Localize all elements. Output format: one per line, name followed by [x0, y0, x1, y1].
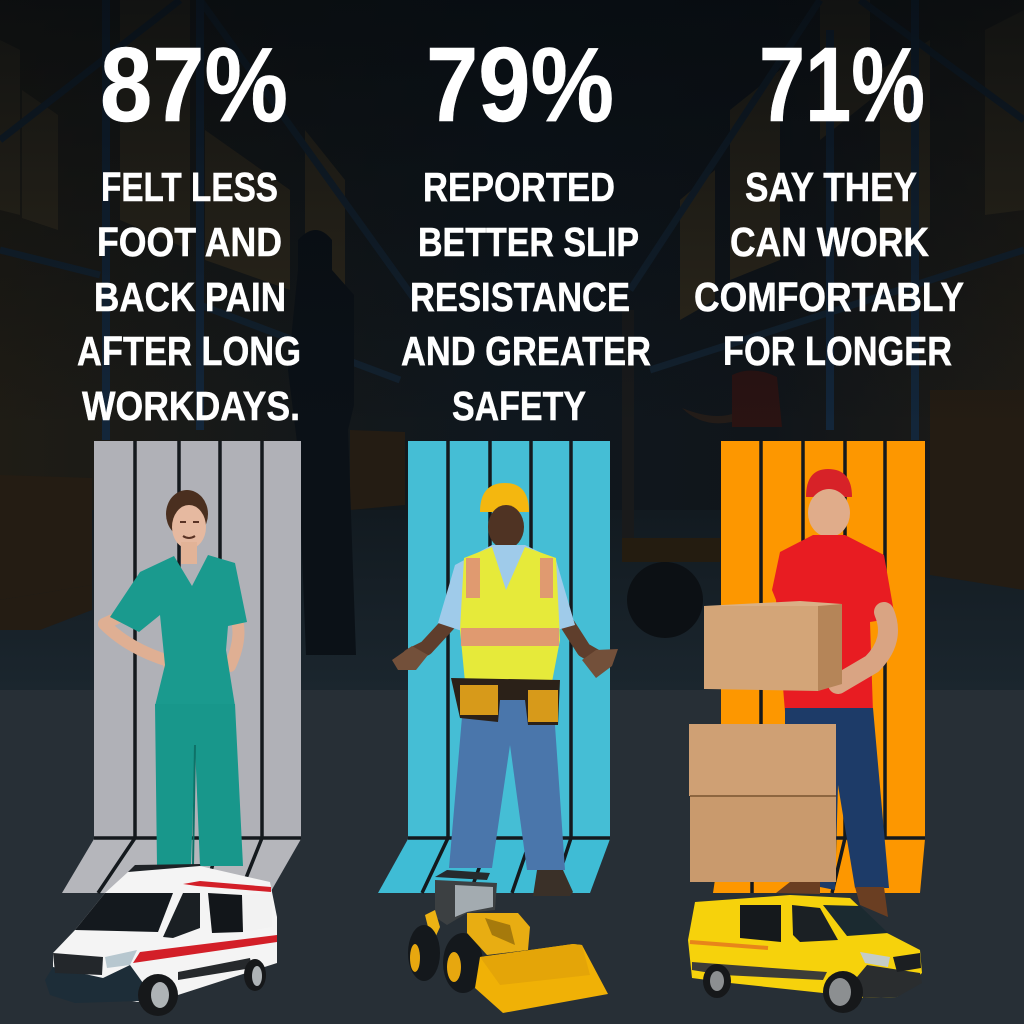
description: slip resistance — [401, 164, 651, 429]
stat: 71%: 71% — [759, 26, 925, 144]
blue striped backdrop — [378, 441, 610, 893]
description: slip resistance: REPORTED — [423, 164, 615, 210]
description: foot and back pain: FOOT AND — [97, 219, 282, 265]
description: slip resistance: AND GREATER — [401, 328, 651, 374]
description: comfort: SAY THEY — [745, 164, 917, 210]
person: nurse in teal scrubs — [104, 490, 247, 866]
description: foot and back pain: BACK PAIN — [94, 274, 286, 320]
person: construction worker — [392, 483, 618, 896]
floor — [0, 690, 1024, 1024]
vehicle: ambulance — [45, 864, 277, 1016]
icon: open hands — [392, 646, 618, 678]
vehicle: yellow bulldozer — [408, 870, 608, 1013]
description: comfort: COMFORTABLY — [694, 274, 964, 320]
description: foot and back pain: FELT LESS — [101, 164, 278, 210]
person: delivery worker with boxes — [772, 469, 895, 917]
description: foot and back pain — [77, 164, 301, 429]
silhouette worker — [288, 230, 356, 655]
orange striped backdrop — [713, 441, 925, 893]
description: foot and back pain: WORKDAYS. — [82, 383, 300, 429]
gray striped backdrop — [62, 441, 301, 893]
description: foot and back pain: AFTER LONG — [77, 328, 301, 374]
description: comfort: FOR LONGER — [723, 328, 952, 374]
stat: 79%: 79% — [426, 26, 614, 144]
stat column 3 text — [694, 26, 964, 374]
vehicle: yellow van — [688, 895, 922, 1013]
warehouse background — [0, 0, 1024, 690]
face details — [180, 522, 199, 538]
forklift silhouette — [622, 310, 782, 638]
description: comfort — [694, 164, 964, 374]
icon: stacked cardboard boxes — [689, 601, 842, 882]
stat: 87%: 87% — [100, 26, 288, 144]
stat column 2 text — [401, 26, 651, 429]
description: slip resistance: BETTER SLIP — [418, 219, 639, 265]
description: comfort: CAN WORK — [730, 219, 929, 265]
stat column 1 text — [77, 26, 301, 429]
description: slip resistance: RESISTANCE — [410, 274, 630, 320]
description: slip resistance: SAFETY — [452, 383, 586, 429]
